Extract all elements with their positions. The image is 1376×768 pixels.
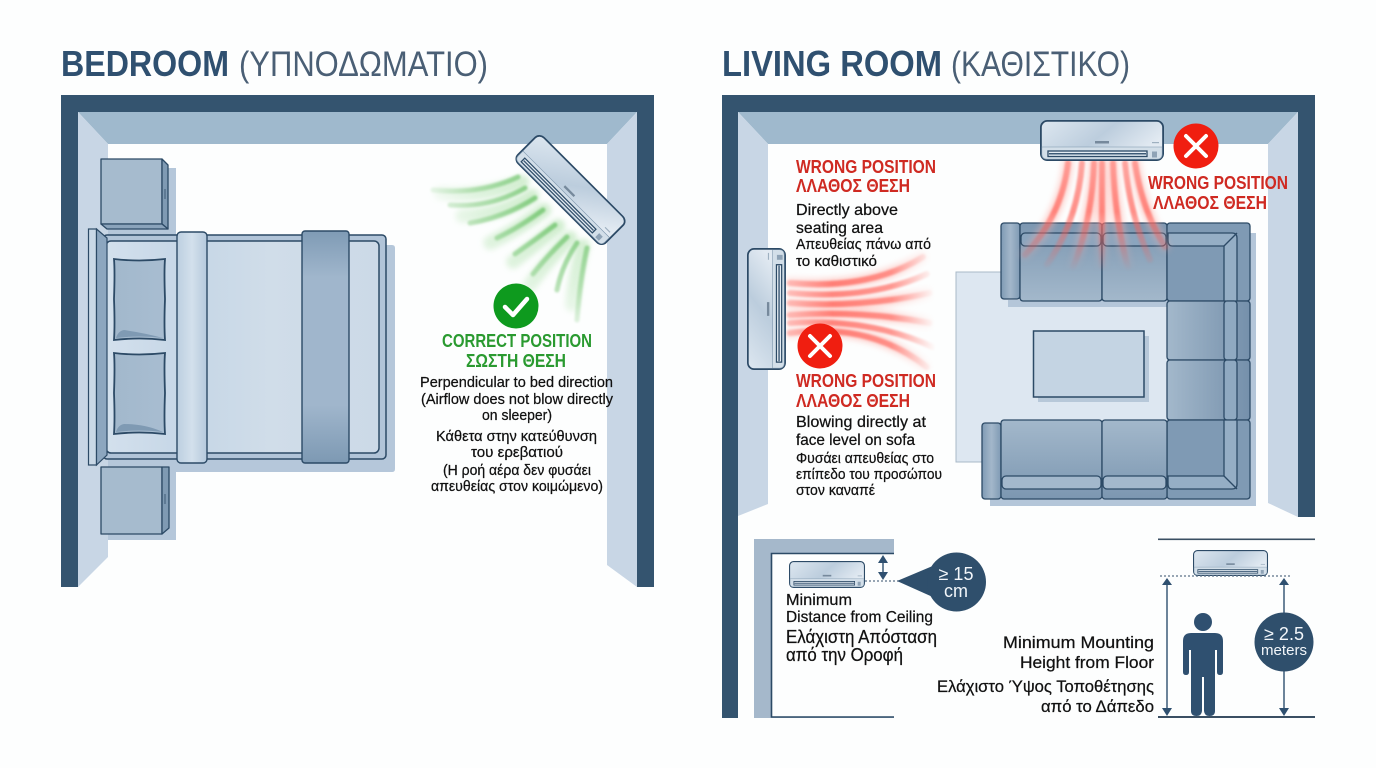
text: minimum distance from ceiling: Minimum [786, 592, 852, 609]
callout: wrong position top right [1148, 172, 1288, 213]
ceiling corner [754, 539, 894, 718]
callout: directly above seating area: ΛΛΑΘΟΣ ΘΕΣΗ [796, 175, 910, 196]
icon: green check [494, 284, 538, 328]
sofa corner and right section [1167, 223, 1250, 499]
airflow: green [433, 177, 587, 320]
bubble: 2.5 meters [1254, 612, 1314, 672]
air conditioner: clearance view [790, 562, 864, 587]
callout: correct position: on sleeper) [482, 407, 552, 424]
nightstand bottom [101, 467, 169, 534]
air conditioner: correct position [514, 133, 627, 247]
bedroom walls [61, 95, 654, 587]
bed and nightstand shadow [108, 168, 395, 540]
title: bedroom: (ΥΠΝΟΔΩΜΑΤΙΟ) [239, 45, 488, 84]
rug [956, 272, 1176, 462]
bed [88, 229, 386, 465]
callout: directly above seating area: Directly above [796, 202, 898, 219]
text: minimum mounting height: Minimum Mounting [1003, 633, 1154, 652]
air conditioner: above sofa [1041, 121, 1163, 160]
airflow: red from ceiling unit [1025, 163, 1165, 268]
text: minimum mounting height: από το Δάπεδο [1041, 697, 1154, 716]
sectional sofa [982, 223, 1250, 499]
callout: blowing at face level [796, 370, 942, 499]
callout: correct position: του ερεβατιού [471, 444, 563, 461]
arrow: height right [1279, 578, 1289, 716]
air conditioner: height view [1194, 551, 1267, 575]
callout: directly above seating area: Απευθείας πάνω από [796, 236, 931, 253]
icon: person [1183, 613, 1223, 716]
callout: blowing at face level: WRONG POSITION [796, 370, 936, 391]
callout: blowing at face level: στον καναπέ [796, 482, 875, 499]
ceiling and floor lines [1158, 538, 1315, 718]
callout: directly above seating area: WRONG POSITION [796, 156, 936, 177]
text: minimum distance from ceiling: Distance from Ceiling [786, 609, 933, 626]
icon: red cross left [798, 324, 842, 368]
callout: blowing at face level: Blowing directly at [796, 414, 927, 431]
callout: correct position: (Airflow does not blow directly [421, 391, 613, 408]
callout: blowing at face level: επίπεδο του προσώπου [796, 466, 942, 483]
living room walls [722, 95, 1315, 718]
text: minimum mounting height: Ελάχιστο Ύψος Τοποθέτησης [937, 677, 1154, 696]
text: minimum distance from ceiling: από την Οροφή [786, 645, 903, 665]
title: bedroom [61, 43, 488, 84]
callout: wrong position top right: ΛΛΑΘΟΣ ΘΕΣΗ [1153, 192, 1267, 213]
callout: correct position: απευθείας στον κοιμώμενο) [431, 478, 603, 495]
callout: directly above seating area [796, 156, 936, 270]
air conditioner: left wall [748, 249, 785, 369]
panel: living room [722, 95, 1315, 718]
callout: blowing at face level: ΛΛΑΘΟΣ ΘΕΣΗ [796, 390, 910, 411]
diagram: minimum mounting height [937, 538, 1315, 718]
text: minimum distance from ceiling [786, 592, 937, 665]
icon: red cross top [1174, 124, 1218, 168]
callout: blowing at face level: face level on sofa [796, 432, 915, 449]
bubble: 15 cm: ≥ 15 [939, 564, 973, 584]
panel: bedroom [61, 95, 654, 587]
text: minimum distance from ceiling: Ελάχιστη Απόσταση [786, 627, 937, 647]
blanket band [302, 231, 349, 463]
coffee table [1034, 331, 1149, 402]
callout: directly above seating area: το καθιστικό [796, 253, 877, 270]
callout: correct position: CORRECT POSITION [442, 330, 592, 351]
sofa shadow [990, 233, 1256, 506]
blanket fold [177, 232, 207, 463]
title: living room: (ΚΑΘΙΣΤΙΚΟ) [951, 45, 1130, 84]
text: minimum mounting height: Height from Floor [1020, 653, 1154, 672]
title: bedroom: BEDROOM [61, 43, 229, 84]
callout: correct position: ΣΩΣΤΗ ΘΕΣΗ [466, 350, 566, 371]
callout: correct position: (Η ροή αέρα δεν φυσάει [443, 462, 591, 479]
pillow bottom [114, 353, 165, 434]
bubble: 15 cm: cm [944, 581, 968, 601]
nightstand top [101, 159, 168, 229]
callout: correct position: Κάθετα στην κατεύθυνση [436, 428, 597, 445]
title: living room: LIVING ROOM [722, 43, 942, 84]
sofa top section [1001, 223, 1167, 301]
diagram: minimum distance from ceiling [754, 539, 986, 718]
callout: directly above seating area: seating area [796, 220, 883, 237]
dotted guide [865, 580, 900, 582]
bubble: 15 cm [897, 552, 986, 612]
text: minimum mounting height [937, 633, 1154, 716]
callout: wrong position top right: WRONG POSITION [1148, 172, 1288, 193]
arrow: height left [1162, 578, 1172, 716]
dotted guide [1160, 575, 1290, 577]
sofa bottom section [982, 420, 1167, 499]
headboard [88, 229, 107, 465]
title: living room [722, 43, 1130, 84]
bubble: 2.5 meters: ≥ 2.5 [1264, 624, 1304, 644]
bubble: 2.5 meters: meters [1261, 642, 1307, 659]
arrow: ceiling clearance [878, 555, 888, 580]
airflow: red from wall unit [790, 257, 933, 367]
callout: correct position: Perpendicular to bed direction [420, 374, 613, 391]
pillow top [114, 259, 165, 340]
callout: correct position [420, 330, 613, 495]
callout: blowing at face level: Φυσάει απευθείας στο [796, 450, 934, 467]
